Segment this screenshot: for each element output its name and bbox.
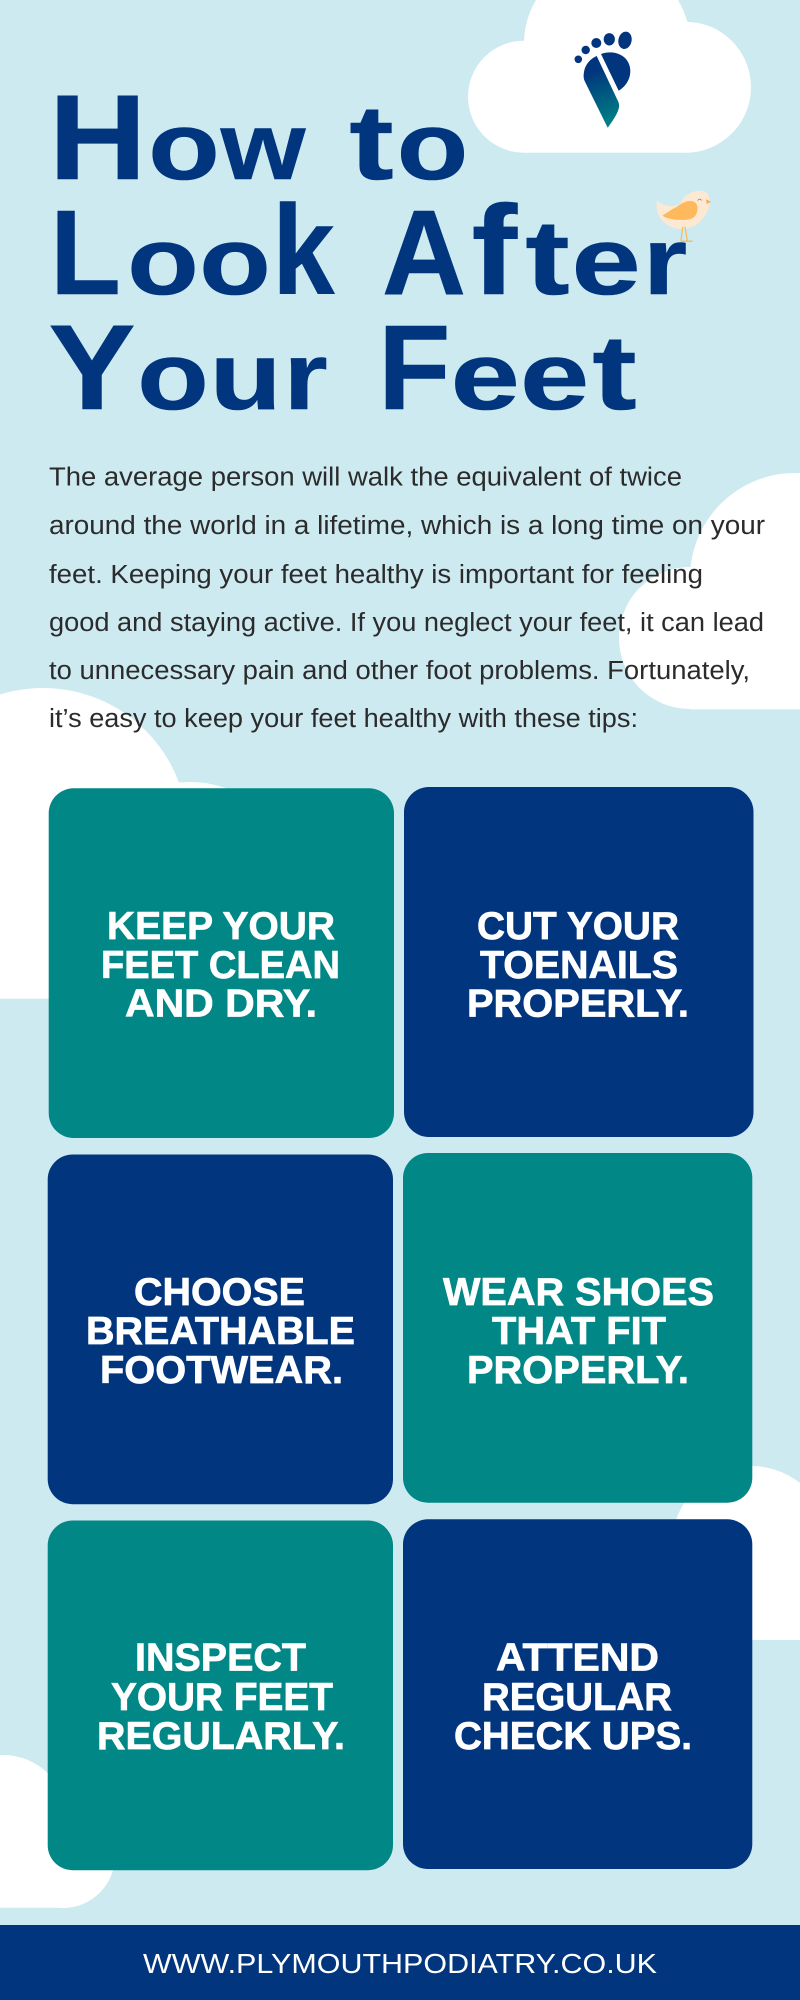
panel: attend regular check ups: REGULAR — [482, 1676, 672, 1719]
panel: keep your feet clean and dry: FEET CLEAN — [101, 944, 340, 987]
intro text: feet. Keeping your feet healthy is important for feeling — [49, 561, 703, 589]
icon: bird — [657, 191, 711, 241]
panel: inspect your feet regularly — [48, 1520, 393, 1870]
title: t — [525, 199, 570, 317]
panel: choose breathable footwear: BREATHABLE — [86, 1310, 355, 1353]
title: A — [382, 184, 466, 320]
title: w — [220, 93, 306, 200]
cloud: left of intro — [0, 688, 298, 999]
title: H — [49, 69, 147, 205]
title: e — [572, 208, 641, 315]
intro text — [49, 464, 766, 733]
title: o — [397, 93, 468, 200]
panel: attend regular check ups: CHECK UPS. — [454, 1715, 692, 1758]
title — [48, 69, 687, 435]
cloud: top right — [468, 0, 751, 153]
title: F — [378, 299, 450, 435]
intro text: it’s easy to keep your feet healthy with these tips: — [49, 705, 638, 733]
panel: choose breathable footwear: FOOTWEAR. — [100, 1349, 343, 1392]
title: o — [148, 93, 220, 200]
intro text: The average person will walk the equivalent of twice — [49, 464, 682, 492]
title: f — [472, 179, 518, 321]
title: r — [284, 323, 328, 430]
title: Y — [48, 299, 136, 435]
footer url: WWW.PLYMOUTHPODIATRY.CO.UK — [143, 1948, 657, 1979]
panel: inspect your feet regularly: REGULARLY. — [97, 1715, 345, 1758]
title: e — [451, 323, 520, 430]
panel: cut your toenails properly — [404, 787, 754, 1137]
panel: choose breathable footwear: CHOOSE — [134, 1271, 305, 1314]
intro text: to unnecessary pain and other foot problems. Fortunately, — [49, 657, 750, 685]
title: t — [592, 314, 637, 432]
title: o — [127, 208, 199, 315]
panel: cut your toenails properly: TOENAILS — [480, 944, 678, 987]
panel: attend regular check ups — [403, 1519, 752, 1869]
title: k — [272, 179, 335, 321]
icon: foot logo — [574, 30, 633, 128]
panel: wear shoes that fit properly: PROPERLY. — [467, 1349, 689, 1392]
panel: wear shoes that fit properly: THAT FIT — [492, 1310, 666, 1353]
panel: choose breathable footwear — [48, 1154, 393, 1504]
panel: keep your feet clean and dry: AND DRY. — [125, 983, 317, 1026]
title: e — [520, 323, 589, 430]
panel: keep your feet clean and dry — [49, 788, 394, 1138]
panel: wear shoes that fit properly — [403, 1153, 752, 1503]
title: r — [643, 208, 687, 315]
panel: cut your toenails properly: PROPERLY. — [467, 983, 689, 1026]
cloud: lower left — [0, 1755, 115, 1908]
panel: inspect your feet regularly: INSPECT — [135, 1637, 306, 1680]
panel: keep your feet clean and dry: KEEP YOUR — [107, 905, 335, 948]
cloud: right of intro — [619, 473, 800, 709]
title: L — [50, 184, 121, 320]
title: t — [349, 84, 394, 202]
panel: attend regular check ups: ATTEND — [496, 1637, 659, 1680]
title: o — [137, 323, 209, 430]
cloud: lower right — [672, 1466, 800, 1640]
intro text: good and staying active. If you neglect your feet, it can lead — [49, 609, 764, 637]
footer bar — [0, 1925, 800, 2000]
panel: inspect your feet regularly: YOUR FEET — [111, 1676, 333, 1719]
title: u — [210, 323, 282, 430]
panel: cut your toenails properly: CUT YOUR — [477, 905, 679, 948]
panel: wear shoes that fit properly: WEAR SHOES — [443, 1271, 714, 1314]
title: o — [199, 208, 271, 315]
intro text: around the world in a lifetime, which is a long time on your — [49, 512, 766, 540]
